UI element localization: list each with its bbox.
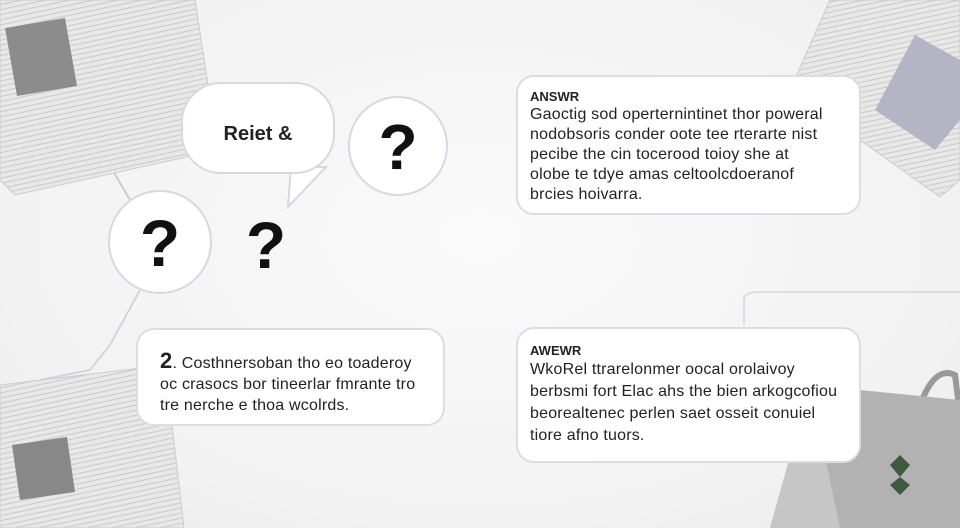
panel: answer bottom: berbsmi fort Elac ahs the bien arkogcofiou	[530, 383, 837, 400]
panel: answer top: pecibe the cin tocerood toioy she at	[530, 146, 789, 163]
panel: point 2: 2. Costhnersoban tho eo toaderoy	[160, 348, 412, 373]
panel: answer bottom: tiore afno tuors.	[530, 427, 645, 444]
panel: answer bottom: beorealtenec perlen saet osseit conuiel	[530, 405, 815, 422]
icon: question circle left: ?	[140, 206, 180, 280]
icon: question mark: ?	[246, 208, 286, 282]
speech bubble	[181, 82, 335, 210]
panel: point 2	[136, 328, 445, 426]
panel: answer top: brcies hoivarra.	[530, 186, 643, 203]
icon: question circle left	[108, 190, 212, 294]
panel: answer top: ANSWR	[530, 89, 579, 104]
panel: answer top	[516, 75, 861, 215]
panel: answer bottom	[516, 327, 861, 463]
panel: answer top: Gaoctig sod operternintinet thor poweral	[530, 106, 823, 123]
icon: question circle top	[348, 96, 448, 196]
panel: answer bottom: AWEWR	[530, 343, 581, 358]
panel: point 2: tre nerche e thoa wcolrds.	[160, 397, 349, 414]
icon: question circle top: ?	[378, 111, 418, 183]
icon: shopping bag	[770, 370, 960, 528]
panel: point 2: oc crasocs bor tineerlar fmrante tro	[160, 376, 415, 393]
speech bubble: Reiet &	[224, 123, 292, 145]
panel: answer top: olobe te tdye amas celtoolcdoeranof	[530, 166, 794, 183]
panel: answer bottom: WkoRel ttrarelonmer oocal orolaivoy	[530, 361, 795, 378]
panel: answer top: nodobsoris conder oote tee rterarte nist	[530, 126, 817, 143]
